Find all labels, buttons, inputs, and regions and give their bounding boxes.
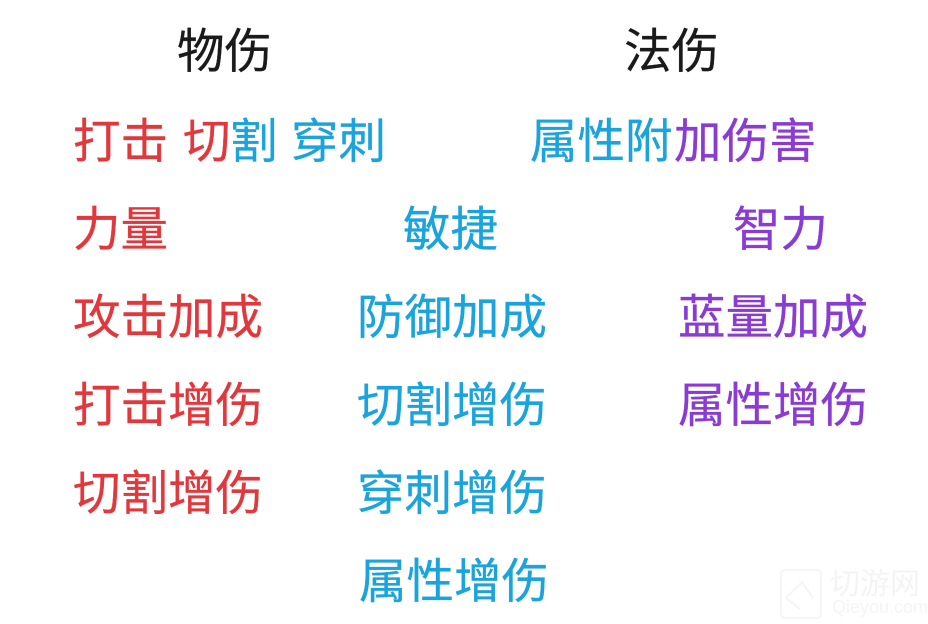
watermark (780, 568, 928, 619)
stat: pierce damage increase: 穿刺增伤 (357, 468, 547, 521)
label: cut, red part: 切 (183, 116, 230, 169)
column: dexterity (357, 204, 549, 609)
column: strength (73, 204, 263, 521)
watermark name: 切游网 (830, 568, 920, 601)
stat: attribute damage increase: 属性增伤 (678, 380, 868, 433)
stat heading: dexterity: 敏捷 (403, 204, 498, 257)
stat: cut damage increase: 切割增伤 (357, 380, 547, 433)
column: intelligence (678, 204, 868, 433)
stat: blunt damage increase: 打击增伤 (73, 380, 263, 433)
label: attribute blue part: 属性附 (530, 116, 672, 169)
watermark url: Qieyou.com (832, 597, 928, 617)
stat: attack bonus: 攻击加成 (73, 292, 263, 345)
stat heading: strength: 力量 (73, 204, 168, 257)
damage types: physical (73, 116, 386, 169)
stat heading: intelligence: 智力 (733, 204, 828, 257)
label: pierce: 穿刺 (291, 116, 386, 169)
label: cut, blue part: 割 (230, 116, 278, 169)
damage types: magic (530, 116, 816, 169)
stat: cut damage increase: 切割增伤 (73, 468, 263, 521)
label: added damage purple part: 加伤害 (674, 116, 816, 169)
icon: watermark logo (781, 570, 821, 618)
stat: attribute damage increase: 属性增伤 (359, 556, 549, 609)
stat: defense bonus: 防御加成 (357, 292, 547, 345)
heading: magic damage: 法伤 (624, 26, 719, 79)
stat: mana bonus: 蓝量加成 (678, 292, 868, 345)
label: blunt: 打击 (73, 116, 168, 169)
heading: physical damage: 物伤 (177, 26, 272, 79)
